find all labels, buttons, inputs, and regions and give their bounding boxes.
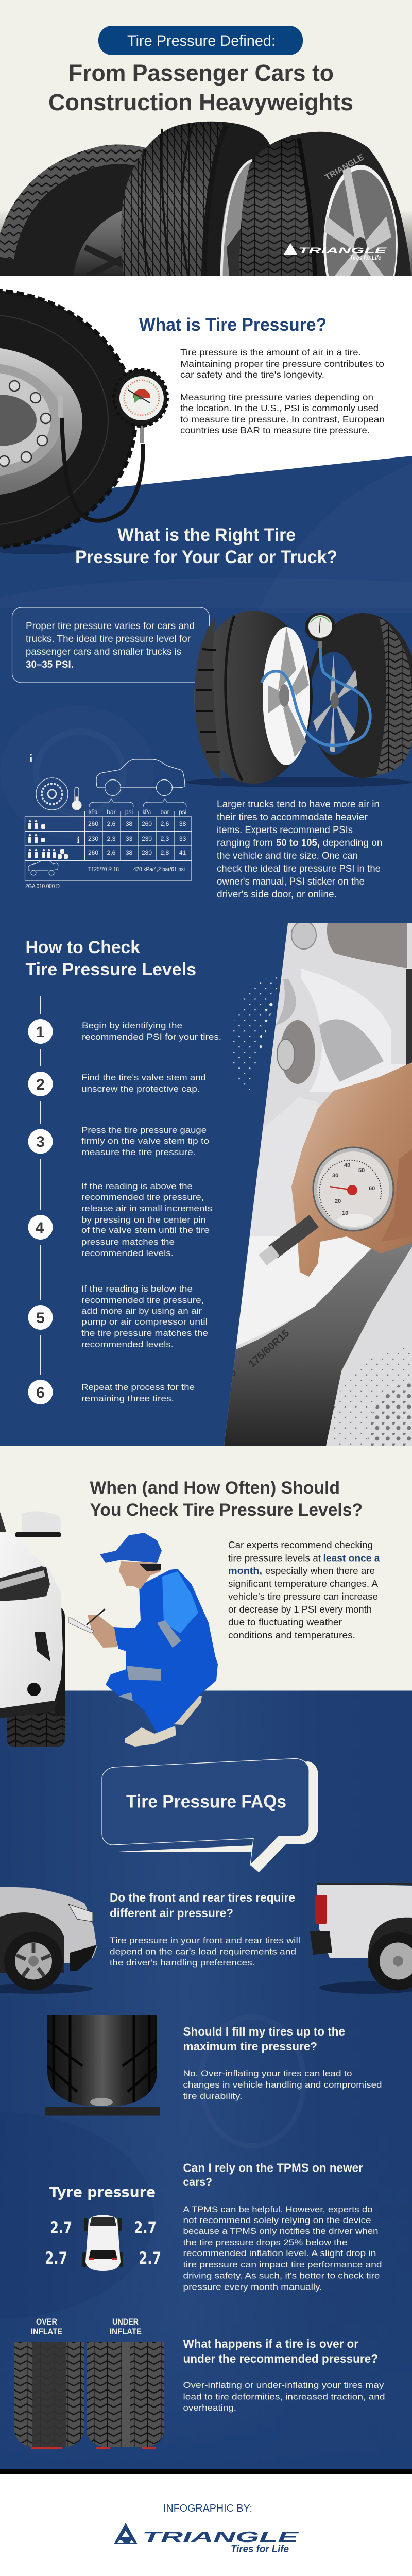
step 4: recommended levels.	[81, 1249, 174, 1258]
question 3: A TPMS can be helpful. However, experts do	[183, 2205, 373, 2214]
pressure table: 260	[142, 820, 152, 827]
pressure table: 33	[179, 835, 186, 842]
hands	[88, 1615, 117, 1648]
when text: or decrease by 1 PSI every month	[228, 1604, 372, 1615]
sidewall lettering	[233, 1329, 288, 1376]
pressure table: 2,6	[161, 820, 169, 827]
front wheel	[7, 1607, 65, 1747]
question 3: not recommend solely relying on the device	[183, 2215, 371, 2225]
larger trucks text: check the ideal tire pressure PSI in the	[217, 863, 381, 874]
step 2: 2	[36, 1076, 45, 1093]
step 1: Begin by identifying the	[82, 1021, 182, 1030]
pen	[87, 1609, 105, 1625]
hero pill label: Tire Pressure Defined:	[127, 32, 276, 49]
pressure table: 260	[88, 849, 98, 856]
question 4: What happens if a tire is over or	[183, 2337, 358, 2350]
how-to section background	[0, 923, 412, 1446]
FAQ speech bubble	[102, 1759, 318, 1872]
bubble shadow	[113, 1761, 318, 1872]
shadow	[185, 777, 412, 787]
pressure table: 2,3	[107, 835, 116, 842]
front tire	[194, 611, 313, 784]
definition text: Tire pressure is the amount of air in a tire.	[180, 347, 361, 358]
sidewall lettering: 175/60R15	[247, 1328, 291, 1370]
pressure table: 41	[179, 849, 186, 856]
step 6: Repeat the process for the	[81, 1383, 195, 1392]
heading: when to check: When (and How Often) Should	[90, 1478, 340, 1498]
pressure table: 2,6	[107, 820, 116, 827]
step 3	[28, 1126, 209, 1157]
question 4: overheating.	[183, 2403, 236, 2413]
pressure table: 230	[142, 835, 152, 842]
pickup truck rear	[310, 1883, 412, 1994]
cap	[100, 1533, 162, 1563]
dial gauge: 40	[344, 1162, 350, 1168]
step 3: measure the tire pressure.	[81, 1148, 196, 1157]
under inflate tire	[87, 2317, 164, 2449]
question 4: lead to tire deformities, increased traction, and	[183, 2392, 385, 2402]
question 3: the tire pressure drops 25% below the	[183, 2238, 347, 2247]
step connector lines	[40, 996, 41, 1375]
FAQ section background	[0, 1691, 412, 2469]
white car front	[0, 1512, 65, 1747]
info icon: i	[29, 752, 33, 766]
question 3	[183, 2161, 382, 2292]
when text	[228, 1539, 380, 1640]
under inflate tire: INFLATE	[110, 2327, 142, 2336]
step 3: firmly on the valve stem tip to	[81, 1137, 209, 1146]
larger trucks text: 50 to 105,	[276, 837, 320, 849]
pressure table: T125/70 R 18	[88, 866, 119, 873]
question 3: because a TPMS only notifies the driver when	[183, 2226, 378, 2236]
small gauge	[305, 613, 336, 648]
right tire: TRIANGLE	[323, 153, 366, 182]
TPMS display: 2.7	[45, 2248, 67, 2268]
title: From Passenger Cars to	[68, 60, 334, 86]
larger trucks text: depending on	[322, 837, 382, 849]
right tire	[239, 132, 411, 276]
back tire	[307, 613, 412, 778]
small car trunk icon	[28, 861, 58, 870]
step 1	[28, 1019, 221, 1044]
question 2	[183, 2025, 382, 2101]
when text: especially when there are	[265, 1565, 375, 1576]
hero tires photo	[0, 122, 411, 276]
Triangle logo: Tires for Life	[231, 2544, 289, 2555]
hand	[291, 1062, 412, 1277]
question 2: Should I fill my tires up to the	[183, 2025, 345, 2038]
dial gauge	[313, 1147, 393, 1231]
heading: how to check: How to Check	[26, 938, 140, 957]
sleeve highlight	[162, 1571, 198, 1633]
pressure table: kPa	[143, 808, 151, 816]
step 3: 3	[36, 1133, 45, 1150]
heading: what is tire pressure: What is Tire Pressure?	[139, 315, 327, 335]
middle tire	[121, 122, 273, 276]
question 4: Over-inflating or under-inflating your tires may	[183, 2380, 384, 2390]
question 3: cars?	[183, 2175, 212, 2189]
TPMS display: 2.7	[50, 2218, 72, 2238]
larger trucks text: their tires to accommodate heavier	[217, 811, 368, 823]
heading: how to check	[26, 938, 196, 979]
step 5: pump or air compressor until	[81, 1317, 208, 1327]
step 4: pressure matches the	[81, 1238, 175, 1247]
step 6: 6	[36, 1384, 45, 1401]
pressure table: psi	[179, 808, 186, 816]
question 1: Tire pressure in your front and rear tires will	[110, 1936, 300, 1945]
question 3: pressure every month manually.	[183, 2282, 322, 2292]
photo: hand with gauge on wheel	[221, 921, 412, 1446]
gauge hose	[62, 418, 143, 521]
question 1: the driver's handling preferences.	[110, 1958, 255, 1968]
TPMS display: Tyre pressure	[49, 2183, 156, 2200]
reflective bands	[118, 1620, 181, 1701]
title: Construction Heavyweights	[48, 89, 353, 115]
definition text	[180, 347, 385, 435]
when text: due to fluctuating weather	[228, 1617, 342, 1628]
mechanic	[68, 1533, 218, 1747]
gauge head and stem	[58, 395, 144, 443]
heading: right tire pressure	[75, 525, 337, 567]
step 4	[28, 1182, 212, 1258]
definition text: car safety and the tire's longevity.	[180, 369, 324, 380]
wheel surface	[221, 923, 412, 1446]
TPMS display: 2.7	[134, 2218, 157, 2238]
larger trucks text: Larger trucks tend to have more air in	[217, 799, 380, 810]
pressure table: bar	[107, 808, 116, 816]
pressure table: 230	[88, 835, 98, 842]
over inflate tire: OVER	[36, 2317, 57, 2327]
thermometer icon	[72, 787, 81, 810]
step 5	[28, 1284, 208, 1349]
definition text: Measuring tire pressure varies depending on	[180, 392, 373, 402]
when text: vehicle's tire pressure can increase	[228, 1591, 378, 1602]
when text: least once a	[323, 1553, 380, 1563]
step 4: by pressing on the center pin	[81, 1215, 206, 1225]
headlight	[0, 1566, 50, 1601]
step 5: recommended levels.	[81, 1340, 174, 1349]
definition text: countries use BAR to measure tire pressure.	[180, 425, 370, 435]
step 5: the tire pressure matches the	[81, 1329, 208, 1338]
step 2: unscrew the protective cap.	[81, 1084, 200, 1094]
rim lower white	[236, 1236, 381, 1346]
question 1: depend on the car's load requirements and	[110, 1946, 296, 1957]
pressure table: 260	[88, 820, 98, 827]
tire icon	[36, 778, 68, 810]
larger trucks text: ranging from	[217, 837, 273, 849]
hero logo: TRIANGLE	[298, 246, 387, 256]
back shoe	[174, 1695, 202, 1725]
heading: when to check	[90, 1478, 363, 1520]
tire	[0, 290, 135, 554]
pickup truck front	[0, 1887, 97, 1994]
pressure table: 38	[179, 820, 186, 827]
when text: conditions and temperatures.	[228, 1630, 355, 1640]
step 4: recommended tire pressure,	[81, 1193, 204, 1202]
heading: when to check: You Check Tire Pressure Levels?	[90, 1500, 363, 1520]
pressure table: bar	[160, 808, 169, 816]
when text: Car experts recommend checking	[228, 1539, 373, 1550]
two tires with blue hose gauge	[185, 611, 412, 787]
question 3: driving safety. As such, it's better to check tire	[183, 2271, 380, 2280]
larger trucks text	[217, 799, 382, 900]
step 5: If the reading is below the	[81, 1284, 193, 1294]
dial gauge: 50	[358, 1167, 365, 1174]
axle braces	[89, 799, 186, 807]
fog light	[27, 1683, 41, 1696]
larger trucks text: items. Experts recommend PSIs	[217, 824, 353, 836]
step 2	[28, 1072, 206, 1096]
over inflate tire: INFLATE	[31, 2327, 62, 2336]
step 4: 4	[36, 1219, 44, 1236]
step 6	[28, 1380, 195, 1404]
larger trucks text: driver's side door, or online.	[217, 889, 337, 900]
gauge hose on photo	[263, 1221, 314, 1260]
coverall	[106, 1569, 218, 1734]
blue hose	[262, 645, 370, 745]
pressure table: kPa	[89, 808, 97, 816]
hero pill label	[98, 26, 303, 55]
hero logo	[284, 243, 387, 261]
Triangle logo	[114, 2523, 300, 2555]
question 2: maximum tire pressure?	[183, 2040, 317, 2053]
step 5: 5	[36, 1310, 45, 1327]
fingers right	[381, 1149, 412, 1242]
dial gauge: 60	[369, 1185, 375, 1192]
cream section background	[0, 1446, 412, 1691]
question 1	[110, 1891, 300, 1968]
question 1: Do the front and rear tires require	[110, 1891, 295, 1904]
TPMS display	[45, 2183, 161, 2271]
question 2: changes in vehicle handling and compromised	[183, 2080, 382, 2090]
heading: how to check: Tire Pressure Levels	[26, 960, 196, 979]
wheel shading	[242, 921, 412, 1236]
question 1: different air pressure?	[110, 1906, 233, 1920]
question 3: Can I rely on the TPMS on newer	[183, 2161, 363, 2174]
pressure table: psi	[125, 808, 133, 816]
wheel bolts	[0, 381, 51, 466]
pressure table: i	[77, 835, 80, 845]
pressure table: 280	[142, 849, 152, 856]
pressure table: 33	[126, 835, 132, 842]
hero logo: Tires for Life	[350, 254, 381, 261]
heading: right tire pressure: Pressure for Your Car or Truck?	[75, 547, 337, 567]
pressure table: 38	[126, 820, 132, 827]
heading: right tire pressure: What is the Right Tire	[117, 525, 296, 545]
step 5: add more air by using an air	[81, 1307, 202, 1316]
hero background	[0, 0, 412, 276]
dial gauge: 10	[342, 1210, 348, 1216]
car top view	[82, 2215, 123, 2271]
dial gauge: 30	[332, 1173, 338, 1179]
pressure table: 2,8	[161, 849, 169, 856]
bubble body	[102, 1759, 309, 1865]
car outline	[96, 759, 185, 795]
callout: passenger psi: 30–35 PSI.	[26, 659, 74, 670]
callout: passenger psi: Proper tire pressure varies for cars and	[26, 620, 195, 632]
question 4: under the recommended pressure?	[183, 2352, 378, 2365]
head	[119, 1561, 161, 1589]
gauge dial	[114, 369, 167, 426]
larger trucks text: owner's manual, PSI sticker on the	[217, 876, 365, 887]
definition text: the location. In the U.S., PSI is commonly used	[180, 403, 379, 413]
step 4: release air in small increments	[81, 1204, 212, 1213]
blue diagonal section background	[0, 456, 412, 923]
tire sidewall	[224, 1236, 412, 1446]
definition text: Maintaining proper tire pressure contributes to	[180, 359, 384, 369]
question 3: tire pressure can impact tire performance and	[183, 2260, 382, 2269]
footer background	[0, 2469, 412, 2576]
callout: passenger psi: trucks. The ideal tire pressure level for	[26, 633, 191, 645]
step 2: Find the tire's valve stem and	[81, 1073, 206, 1082]
step 3: Press the tire pressure gauge	[81, 1126, 207, 1135]
step 5: recommended tire pressure,	[81, 1296, 204, 1305]
TPMS display: 2.7	[139, 2248, 161, 2268]
when text: month,	[228, 1565, 262, 1576]
step 1: 1	[36, 1024, 44, 1041]
placard code: 2GA 010 000 D	[25, 883, 60, 890]
tire placard	[25, 752, 192, 890]
question 3: recommended inflation level. A slight drop in	[183, 2248, 376, 2258]
Triangle logo: TRIANGLE	[142, 2529, 300, 2546]
when text: significant temperature changes. A	[228, 1578, 379, 1589]
air vent	[35, 1632, 50, 1662]
tire over-inflated illustration	[45, 2015, 160, 2115]
step 1: recommended PSI for your tires.	[82, 1032, 221, 1042]
FAQ speech bubble: Tire Pressure FAQs	[126, 1792, 286, 1811]
question 2: No. Over-inflating your tires can lead to	[183, 2069, 352, 2078]
question 4	[183, 2337, 385, 2413]
step 4: If the reading is above the	[81, 1182, 193, 1191]
pressure table: 38	[126, 849, 132, 856]
mirror	[0, 1512, 61, 1537]
over inflate tire	[14, 2317, 84, 2449]
step 6: remaining three tires.	[81, 1394, 174, 1403]
title	[48, 60, 353, 115]
infographic by label: INFOGRAPHIC BY:	[163, 2503, 252, 2514]
step 4: of the valve stem until the tire	[81, 1226, 210, 1235]
question 2: tire durability.	[183, 2091, 242, 2101]
bumper	[0, 1700, 58, 1718]
callout: passenger psi: passenger cars and smaller trucks is	[26, 646, 181, 657]
when text: tire pressure levels at	[228, 1553, 321, 1563]
halftone dots gray	[330, 1348, 411, 1446]
pressure table	[25, 808, 192, 880]
halftone dots white	[233, 977, 277, 1090]
callout: passenger psi	[12, 607, 209, 683]
under inflate tire: UNDER	[112, 2317, 139, 2327]
larger trucks text: the vehicle and tire size. One can	[217, 850, 358, 861]
front shoe	[125, 1726, 176, 1747]
dial gauge: 20	[335, 1198, 341, 1205]
truck tire with gauge	[0, 290, 167, 554]
definition text: to measure tire pressure. In contrast, European	[180, 414, 385, 425]
pressure table: 420 kPa/4,2 bar/61 psi	[133, 866, 185, 873]
car body	[0, 1533, 63, 1709]
pressure table: 2,6	[107, 849, 116, 856]
tablet	[68, 1618, 94, 1633]
pressure table: 2,3	[161, 835, 169, 842]
sidewall lettering: 8	[226, 1369, 238, 1377]
left tire	[0, 146, 154, 276]
people and luggage icons	[28, 820, 68, 859]
